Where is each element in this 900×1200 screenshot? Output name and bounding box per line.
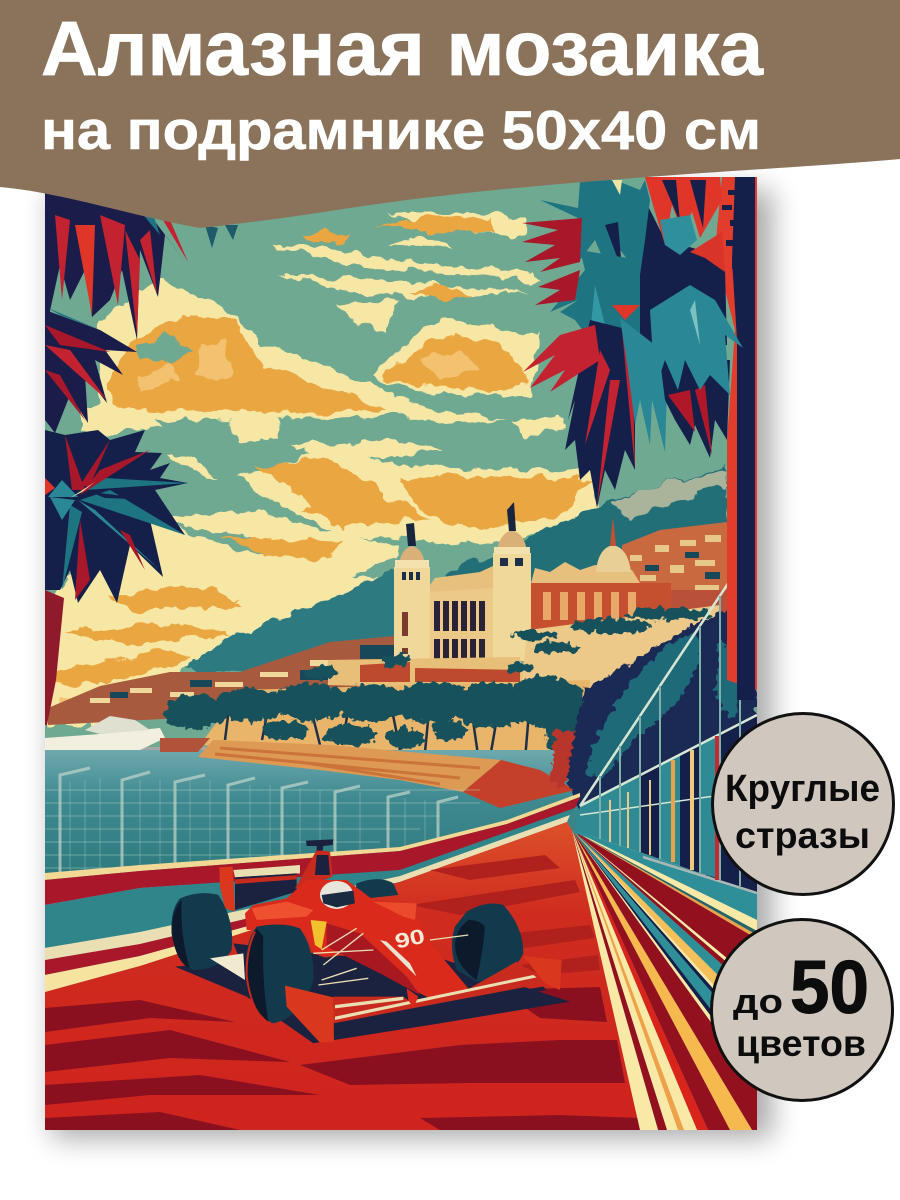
race track (45, 822, 642, 1130)
badge: up to 50 colours (712, 920, 892, 1100)
palace base (328, 657, 522, 686)
subtitle: на подрамнике 50х40 см (41, 99, 761, 161)
yacht (45, 716, 165, 750)
rear left tyre (171, 893, 232, 970)
right tower (493, 553, 531, 661)
car floor (233, 943, 407, 1000)
sea (45, 750, 590, 885)
front right tyre (452, 903, 523, 982)
sky (45, 177, 757, 747)
cockpit shield (311, 920, 327, 949)
left palm trunk (45, 590, 64, 725)
right track fence (572, 583, 757, 894)
second left palm frond (45, 308, 137, 433)
road shadows (45, 987, 642, 1130)
front left tyre (246, 925, 313, 1023)
car body (245, 880, 468, 1000)
mountains (185, 467, 730, 680)
badge: up to 50 colours: до (733, 983, 783, 1021)
helmet (320, 881, 355, 909)
clouds (45, 212, 600, 725)
shoreline trees (162, 673, 585, 750)
left harbour wall (160, 738, 210, 752)
seawall (198, 740, 501, 792)
badge: round rhinestones (712, 714, 894, 894)
right palm fronds (522, 177, 743, 508)
car number: 90 (393, 925, 427, 954)
badge: round rhinestones: стразы (735, 815, 870, 856)
tan ground under trees (204, 680, 590, 750)
front wing (285, 956, 562, 1043)
badge: round rhinestones: Круглые (725, 768, 880, 810)
left tower (394, 567, 430, 659)
sea fence (45, 768, 480, 875)
rear wing (219, 865, 300, 912)
race car (171, 839, 570, 1043)
far rear tyre (356, 879, 398, 898)
header banner (0, 0, 900, 228)
car shadow (175, 947, 570, 1043)
palace terrace trees (304, 608, 712, 679)
tree trunks (224, 715, 530, 750)
dome (596, 545, 631, 572)
palace (328, 502, 727, 690)
suspension arms (313, 928, 468, 985)
right wing (531, 583, 671, 631)
painting: Monaco racing scene (45, 177, 757, 1130)
central hall (430, 585, 493, 661)
right track stripes (572, 830, 757, 1130)
hillside town (48, 522, 727, 725)
title: Алмазная мозаика (41, 6, 764, 92)
top-left palm (45, 193, 238, 340)
right hillside bushes (550, 610, 757, 882)
right palm trunk (715, 177, 757, 700)
left palm fronds (45, 430, 188, 603)
badge: up to 50 colours: 50 (790, 945, 869, 1029)
canvas drop shadow (52, 190, 772, 1138)
badge: up to 50 colours: цветов (736, 1023, 866, 1064)
airbox (295, 850, 333, 888)
left barrier bands (45, 793, 580, 992)
big left cloud (100, 277, 430, 420)
road brush streaks (410, 855, 600, 975)
foliage by the barrier (463, 760, 575, 808)
